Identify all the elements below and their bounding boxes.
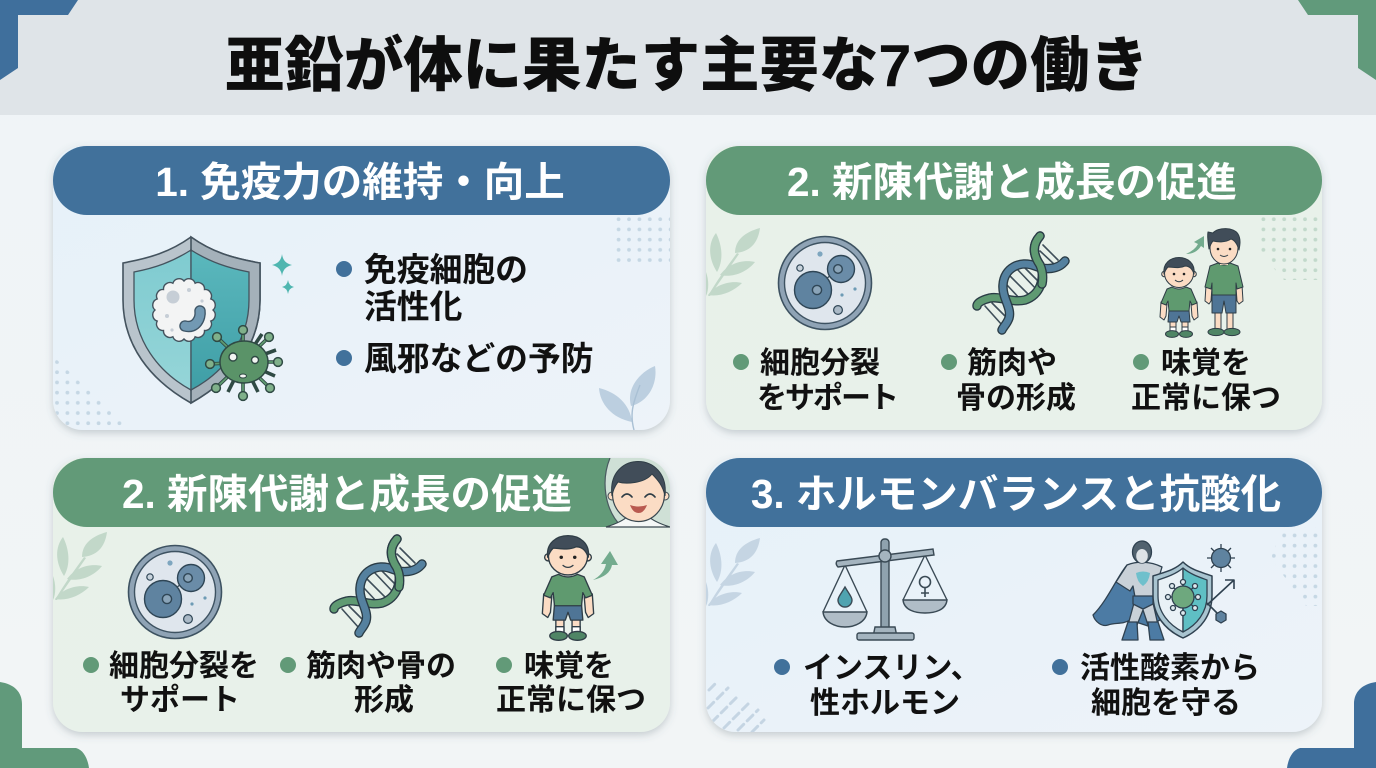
dots: panel 4 top right <box>1272 534 1318 606</box>
text: insulin and sex hormones: 性ホルモン <box>810 687 960 720</box>
icon: superhero with shield <box>1093 541 1235 640</box>
panel 3 header: 2. 新陳代謝と成長の促進 <box>122 471 572 517</box>
corner accent: top left <box>0 0 78 80</box>
icon: leaf sprig panel 2 <box>706 228 760 296</box>
icon: leaf sprig panel 3 <box>53 532 107 600</box>
older child <box>1205 229 1243 336</box>
panel 1 header: 1. 免疫力の維持・向上 <box>155 159 565 205</box>
text: cell division <box>83 650 259 717</box>
title: 亜鉛が体に果たす主要な7つの働き <box>225 32 1149 99</box>
text: taste: 正常に保つ <box>1131 382 1281 415</box>
text: taste <box>496 650 646 717</box>
dots: panel 1 bottom left <box>55 360 122 425</box>
dots: panel 1 top right <box>616 217 670 262</box>
text: cell division: サポート <box>120 684 240 717</box>
text: taste <box>1131 347 1281 415</box>
text: insulin and sex hormones <box>774 652 981 720</box>
icon: growing children <box>1160 229 1243 337</box>
panel 3 header <box>53 458 670 527</box>
panel 4 header: 3. ホルモンバランスと抗酸化 <box>751 471 1281 517</box>
text: insulin and sex hormones: インスリン、 <box>803 652 981 685</box>
panel: 2 metabolism and growth (duplicate) <box>53 458 670 732</box>
text: cell division <box>733 347 897 415</box>
text: taste: 味覚を <box>1161 347 1251 380</box>
bullet list: immune <box>336 251 594 377</box>
icon: child with growth arrow <box>542 536 618 640</box>
corner accent: top right <box>1298 0 1376 80</box>
text: muscle and bone <box>941 347 1076 415</box>
icon: DNA helix <box>334 539 422 633</box>
panel 4 header <box>706 458 1322 527</box>
title band <box>0 0 1376 115</box>
icon: shield with immune cell and virus <box>123 237 282 403</box>
panel: 3 hormones and antioxidant <box>706 458 1322 732</box>
text: protection from reactive oxygen: 細胞を守る <box>1091 687 1241 720</box>
text: taste: 味覚を <box>524 650 614 683</box>
text: muscle and bone: 筋肉や <box>967 347 1057 380</box>
icon: dividing cell <box>778 236 872 330</box>
icon: leaf sprig panel 4 <box>706 538 760 606</box>
panel: 2 metabolism and growth <box>706 146 1322 430</box>
immune cell <box>153 279 215 341</box>
virus <box>206 326 282 400</box>
text: muscle and bone <box>280 650 456 717</box>
text: cell division: をサポート <box>757 382 897 415</box>
icon: balance scale <box>823 539 947 640</box>
text: protection from reactive oxygen: 活性酸素から <box>1080 652 1260 685</box>
text: muscle and bone: 筋肉や骨の <box>306 650 456 683</box>
icon: dividing cell <box>128 546 222 638</box>
corner accent: bottom right <box>1287 682 1376 768</box>
hatch: panel 4 bottom left <box>708 682 764 732</box>
bullet list: immune: 活性化 <box>364 288 463 325</box>
text: taste: 正常に保つ <box>496 684 646 717</box>
text: cell division: 細胞分裂を <box>109 650 259 683</box>
icon: sparkles <box>272 254 294 294</box>
icon: smiling child portrait <box>605 458 670 527</box>
corner accent: bottom left <box>0 682 89 768</box>
panel: 1 immune <box>53 146 670 432</box>
bullet list: immune: 風邪などの予防 <box>364 340 594 377</box>
text: cell division: 細胞分裂 <box>760 347 880 380</box>
text: muscle and bone: 形成 <box>354 684 414 717</box>
panel 2 header <box>706 146 1322 215</box>
icon: leaves panel 1 <box>599 366 656 430</box>
panel 1 header <box>53 146 670 215</box>
bullet list: immune: 免疫細胞の <box>364 251 528 288</box>
text: protection from reactive oxygen <box>1052 652 1260 720</box>
text: muscle and bone: 骨の形成 <box>956 382 1076 415</box>
icon: DNA helix <box>977 236 1065 330</box>
dots: panel 2 top right <box>1262 217 1318 280</box>
panel 2 header: 2. 新陳代謝と成長の促進 <box>787 159 1237 205</box>
